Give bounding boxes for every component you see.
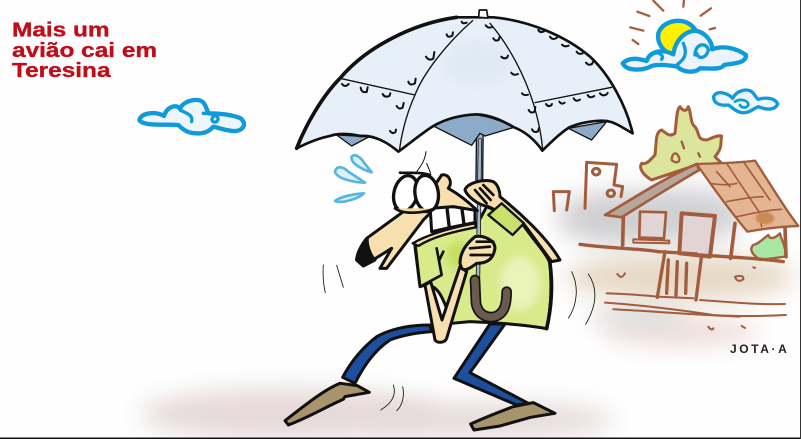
right arm and hand on shaft xyxy=(465,181,560,262)
signature: JOTA·A xyxy=(730,342,789,356)
right shirt edge xyxy=(547,263,551,329)
icon: sweat drops xyxy=(335,155,372,202)
underside panels xyxy=(433,115,514,145)
umbrella tip xyxy=(479,10,488,18)
icon: small right cloud xyxy=(714,90,778,113)
right leg xyxy=(454,324,528,405)
title: Teresina xyxy=(12,59,111,81)
house walls xyxy=(623,212,786,258)
ground shadow and background washes xyxy=(140,189,795,439)
right shoe xyxy=(471,403,555,430)
shirt xyxy=(415,207,551,329)
left shoe xyxy=(285,383,369,425)
umbrella handle xyxy=(475,280,507,317)
canopy seams xyxy=(340,21,612,151)
title: Mais um xyxy=(12,19,110,41)
tree behind house xyxy=(641,107,722,180)
roof xyxy=(605,161,798,232)
canopy left thick outline xyxy=(297,17,457,148)
nose xyxy=(430,175,477,211)
left shirt sleeve xyxy=(416,247,443,287)
lower hand xyxy=(460,236,495,270)
head back and hair xyxy=(357,212,432,268)
canopy xyxy=(297,17,633,152)
icon: left cloud xyxy=(139,100,244,133)
canopy highlight xyxy=(443,40,510,87)
man character xyxy=(285,140,595,430)
umbrella shaft lower xyxy=(478,140,480,278)
rivets xyxy=(342,22,608,133)
right shirt sleeve xyxy=(488,203,524,235)
motion lines xyxy=(323,265,595,411)
teeth xyxy=(430,205,475,232)
distant buildings xyxy=(553,162,623,211)
eyes xyxy=(390,173,421,214)
cloud xyxy=(623,31,746,72)
collar xyxy=(413,223,476,246)
sun xyxy=(658,21,697,56)
umbrella xyxy=(297,10,633,180)
title: avião cai em xyxy=(12,39,157,61)
title xyxy=(12,19,157,81)
garden wall and gate xyxy=(580,244,786,329)
house and town background xyxy=(553,107,798,329)
sun rays xyxy=(630,0,715,44)
left arm xyxy=(425,267,467,342)
icon: sun rays, sun and cloud xyxy=(623,0,746,72)
left leg xyxy=(343,325,432,383)
hair strands xyxy=(417,152,431,173)
umbrella shaft xyxy=(467,117,492,180)
green shrub xyxy=(751,233,785,260)
